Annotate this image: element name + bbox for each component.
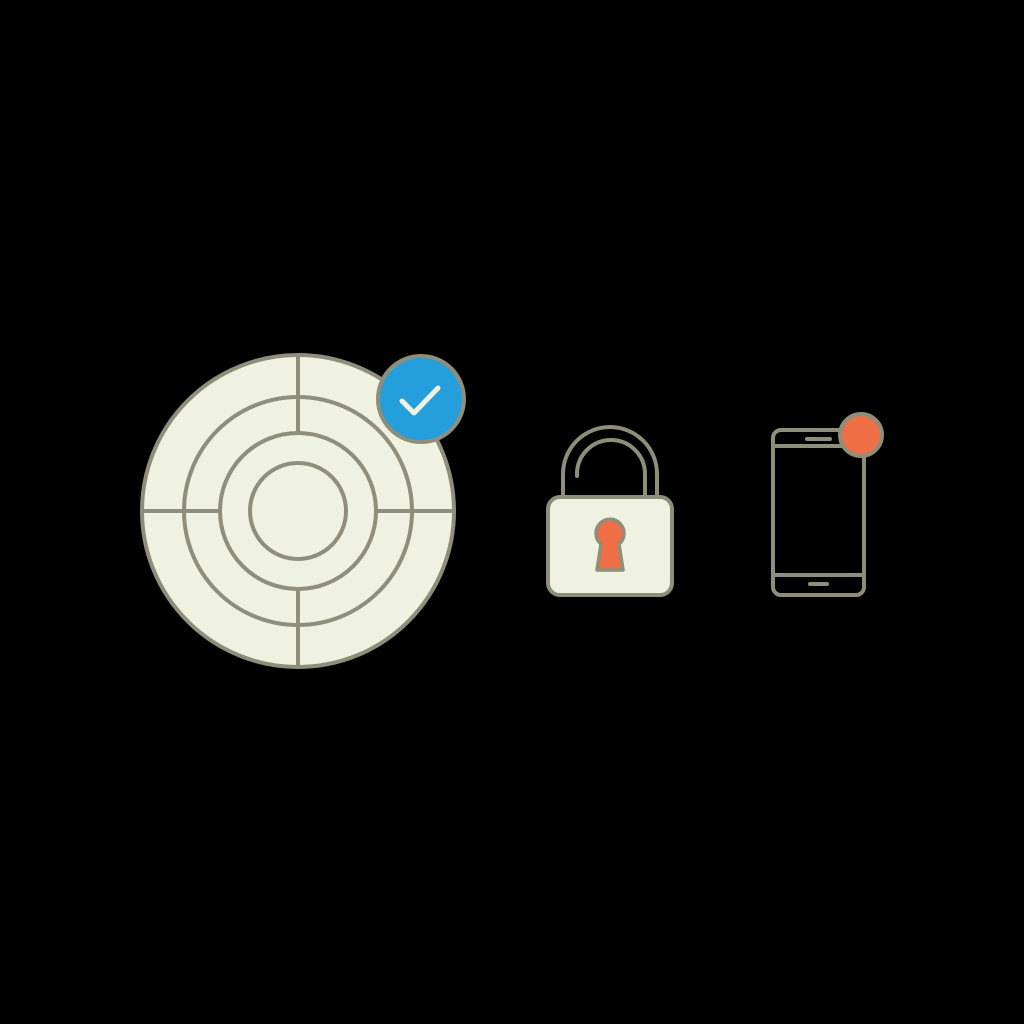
icon: smartphone <box>773 430 864 595</box>
icon: notification dot <box>840 414 882 456</box>
icon: padlock <box>548 427 672 595</box>
icon: check badge <box>378 356 464 442</box>
icon: radar target <box>142 355 454 667</box>
